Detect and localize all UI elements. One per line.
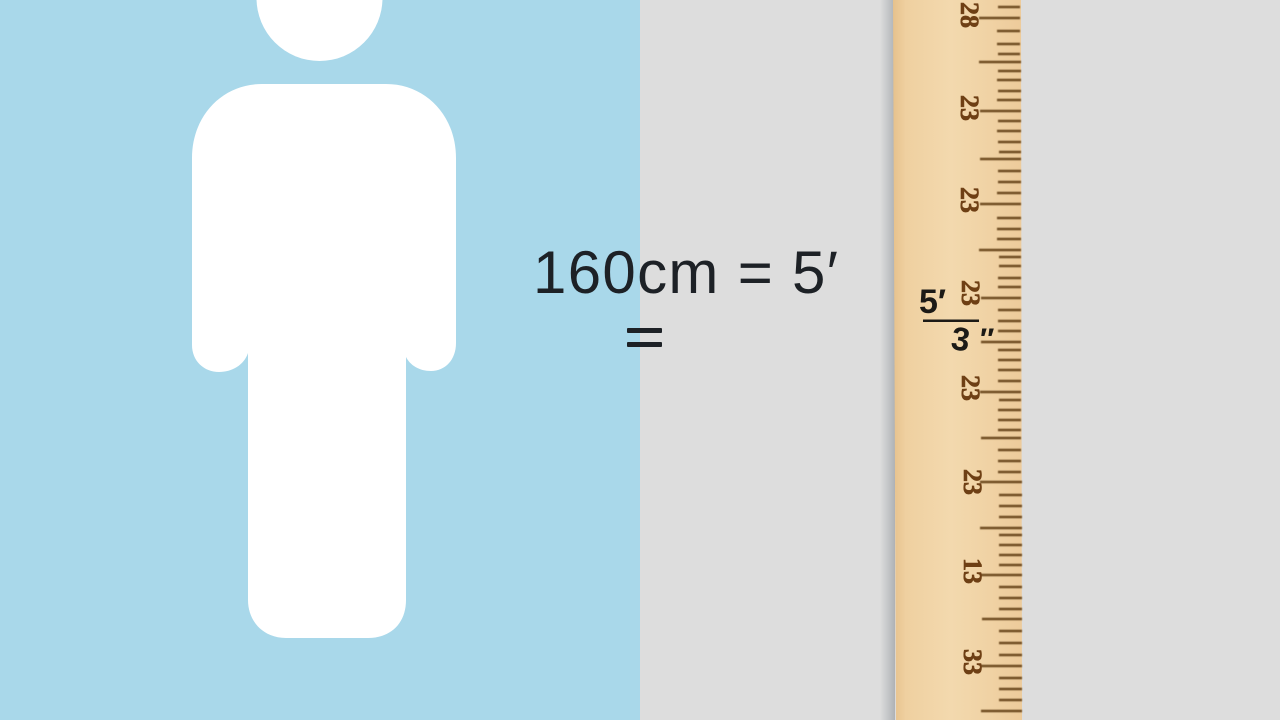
heading: conversion: 160cm = 5′ bbox=[533, 239, 838, 306]
equals sign bbox=[627, 328, 662, 347]
icon: person silhouette bbox=[192, 0, 456, 638]
ruler numbers: 23 bbox=[956, 375, 985, 401]
ruler numbers: 13 bbox=[958, 558, 987, 584]
ruler marker: 5 foot 3 inch: 5′ bbox=[919, 283, 946, 321]
ruler marker: 5 foot 3 inch: 3 bbox=[949, 319, 972, 358]
ruler tick marks bbox=[979, 7, 1022, 711]
ruler numbers: 23 bbox=[955, 187, 984, 213]
ruler numbers: 28 bbox=[955, 2, 984, 28]
ruler numbers bbox=[955, 2, 987, 675]
ruler numbers: 33 bbox=[958, 649, 987, 675]
ruler bbox=[893, 0, 1022, 720]
ruler numbers: 23 bbox=[956, 280, 985, 306]
ruler marker: 5 foot 3 inch bbox=[919, 283, 994, 358]
panel: blue background bbox=[0, 0, 640, 720]
ruler numbers: 23 bbox=[958, 469, 987, 495]
ruler shadow bbox=[880, 0, 895, 720]
ruler numbers: 23 bbox=[955, 95, 984, 121]
panel: grey background bbox=[640, 0, 1280, 720]
ruler marker: 5 foot 3 inch: ″ bbox=[980, 323, 994, 356]
